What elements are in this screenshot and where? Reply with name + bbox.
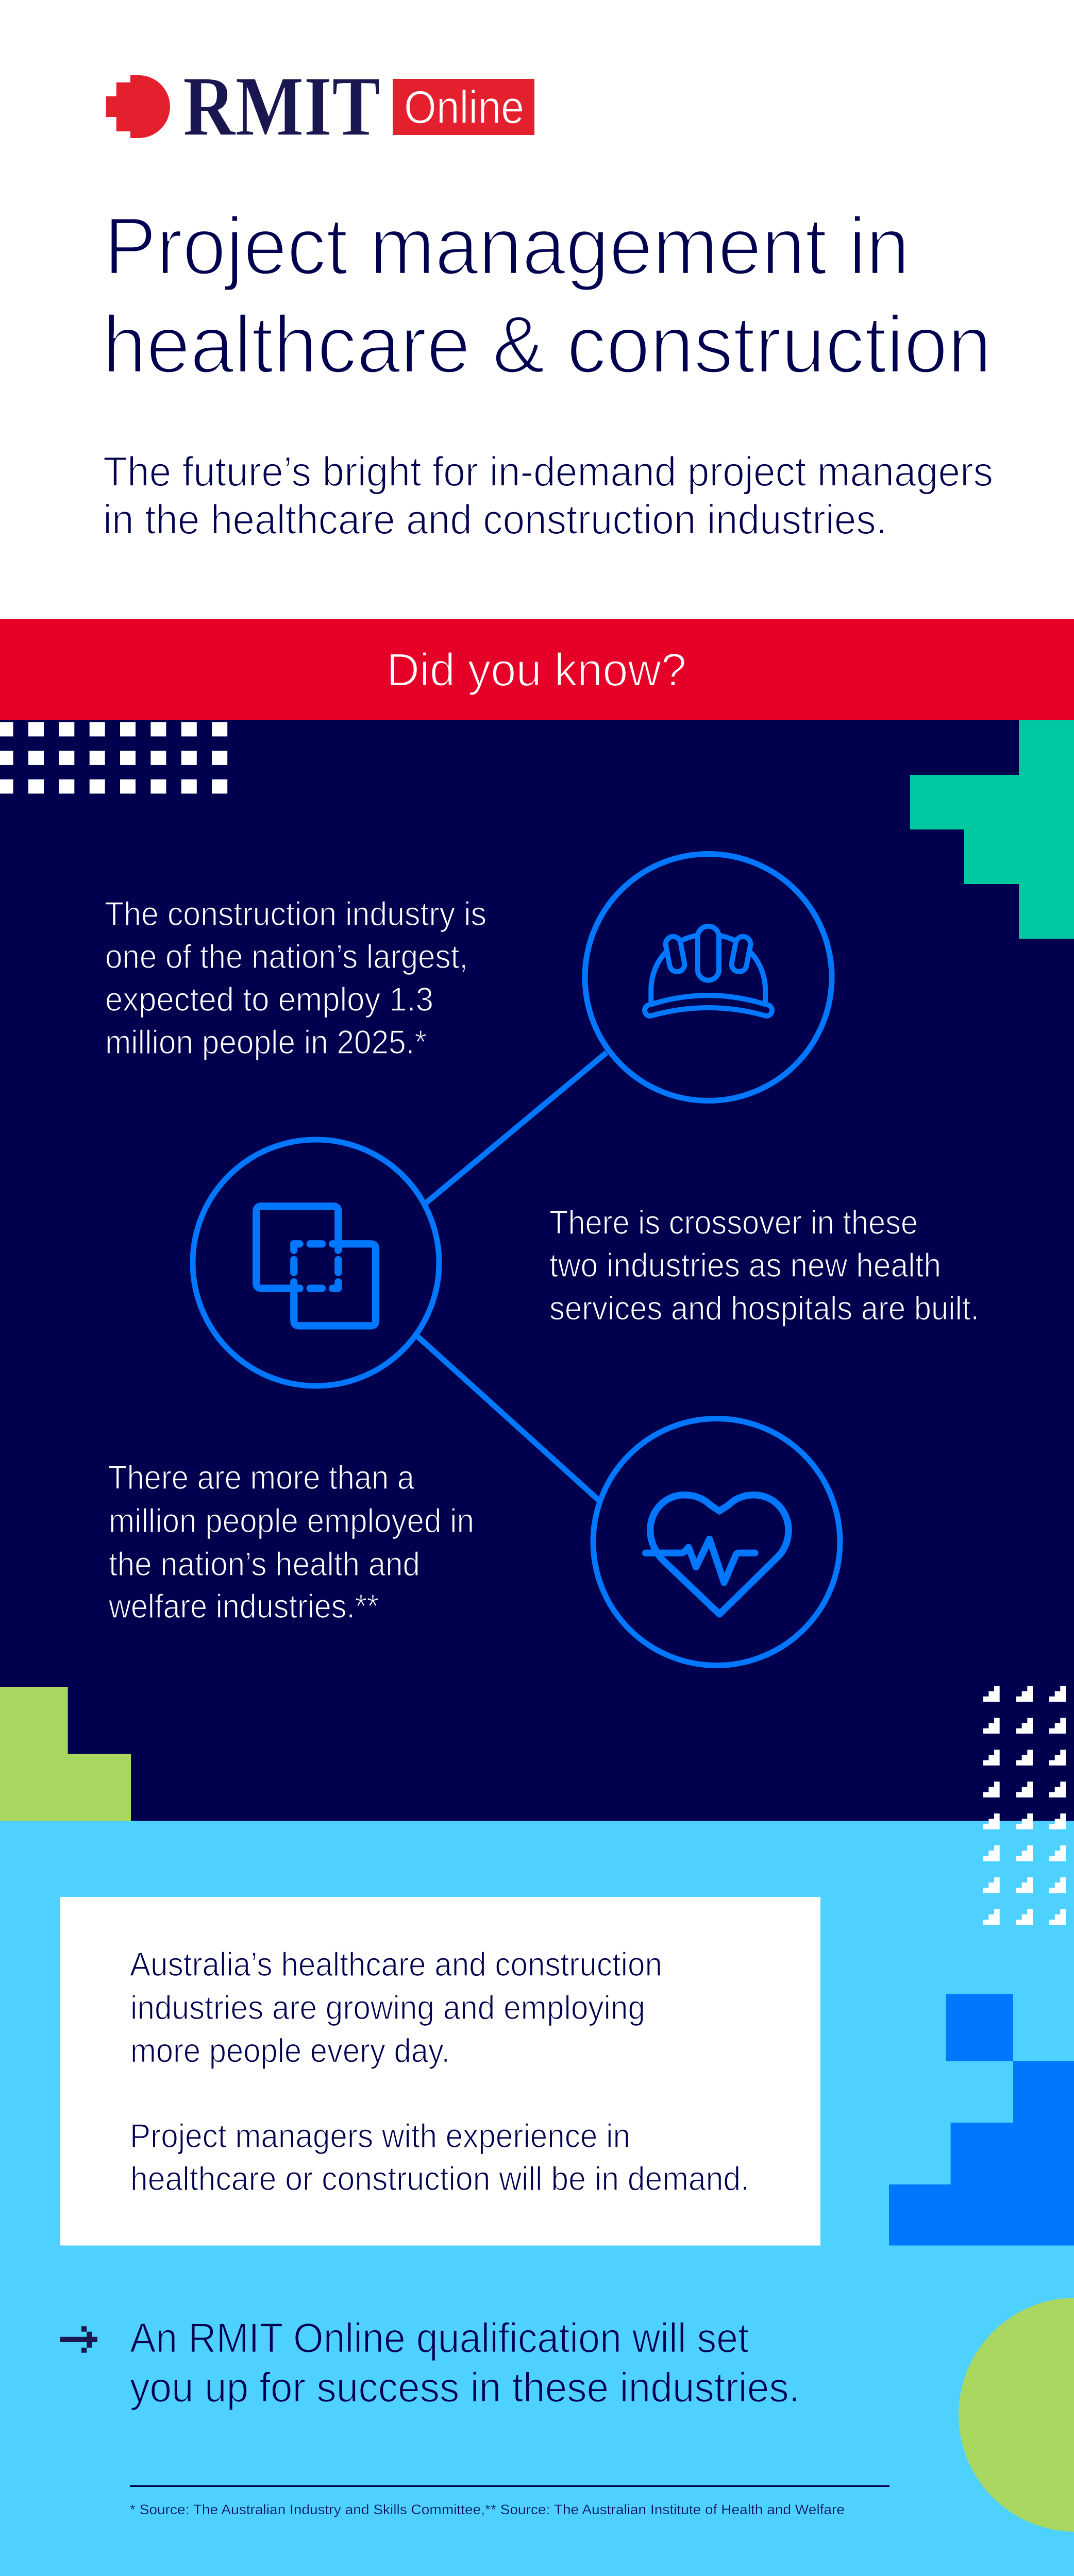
summary paragraph one: industries are growing and employing (130, 1989, 645, 2026)
fact text: crossover: There is crossover in these (549, 1204, 918, 1241)
panel: white summary box (60, 1897, 820, 2245)
summary paragraph two (130, 2117, 749, 2197)
fact text: health and welfare: There are more than a (108, 1459, 415, 1496)
fact text: health and welfare: the nation’s health and (109, 1545, 420, 1583)
fact text: construction: expected to employ 1.3 (105, 980, 433, 1018)
decorative white squares top left (0, 722, 227, 793)
panel: navy facts section (0, 720, 1074, 1821)
icon: arrow (60, 2326, 97, 2353)
footnote sources: * Source: The Australian Industry and Skills Committee,** Source: The Australian Institute of Health and Welfare (130, 2502, 845, 2517)
subtitle (103, 449, 993, 543)
summary paragraph two: Project managers with experience in (130, 2117, 630, 2155)
title: Project management in (104, 201, 910, 292)
panel: light blue section (0, 1821, 1074, 2576)
fact text: crossover (549, 1204, 979, 1327)
banner heading: Did you know? (387, 645, 686, 696)
logo wordmark: RMIT (183, 59, 380, 154)
panel: did you know banner (0, 619, 1074, 720)
icon: overlapping squares in circle (193, 1140, 439, 1386)
divider rule (130, 2485, 890, 2487)
fact text: construction: one of the nation’s largest, (105, 938, 468, 975)
decorative blue steps (889, 1994, 1074, 2245)
call to action: you up for success in these industries. (130, 2365, 800, 2411)
decorative lime circle (959, 2298, 1074, 2532)
subtitle: in the healthcare and construction industries. (103, 497, 887, 543)
fact text: construction (105, 895, 486, 1061)
call to action (130, 2315, 800, 2411)
icon: hard hat in circle (585, 854, 832, 1100)
fact text: health and welfare: welfare industries.** (108, 1587, 379, 1625)
subtitle: The future’s bright for in-demand project managers (103, 449, 993, 495)
connector: centre to helmet (425, 1053, 607, 1204)
title: healthcare & construction (103, 299, 992, 390)
summary paragraph one: Australia’s healthcare and construction (130, 1945, 662, 1983)
icon: heart with pulse in circle (593, 1419, 840, 1665)
decorative lime steps bottom left (0, 1687, 131, 1821)
decorative green steps top right (910, 720, 1074, 939)
decorative white stair tiles (983, 1686, 1066, 1925)
summary paragraph one: more people every day. (130, 2032, 450, 2069)
call to action: An RMIT Online qualification will set (130, 2315, 749, 2362)
logo emblem (106, 75, 170, 138)
logo: RMIT Online (106, 59, 534, 154)
fact text: construction: The construction industry is (105, 895, 486, 933)
logo badge: Online (404, 82, 524, 133)
fact text: crossover: services and hospitals are built. (549, 1289, 979, 1327)
summary paragraph one (130, 1945, 662, 2069)
connector: centre to heart (416, 1335, 599, 1501)
fact text: crossover: two industries as new health (549, 1246, 941, 1284)
fact text: health and welfare: million people employed in (109, 1502, 474, 1539)
fact text: construction: million people in 2025.* (105, 1023, 427, 1061)
fact text: health and welfare (108, 1459, 474, 1625)
summary paragraph two: healthcare or construction will be in demand. (130, 2160, 749, 2197)
title (103, 201, 992, 390)
